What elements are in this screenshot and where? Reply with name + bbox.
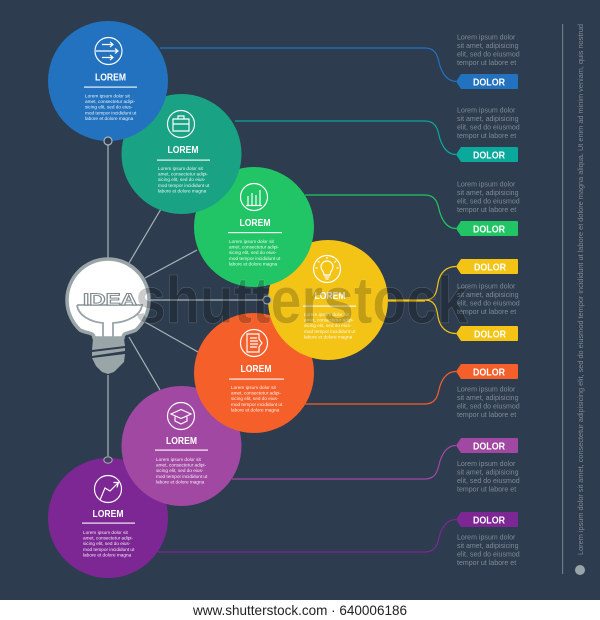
text block: orange: sit amet, adipisicing [457, 395, 519, 402]
text block: orange: tempor ut labore et [457, 412, 516, 419]
tag: yellow upper: DOLOR [474, 262, 507, 274]
body text: amet, consectetur adipi- [231, 391, 281, 396]
body text: amet, consectetur adipi- [304, 318, 354, 323]
heading: LOREM [92, 509, 124, 520]
text block: orange: elit, sed do eiusmod [457, 404, 520, 410]
body text: amet, consectetur adipi- [85, 99, 135, 104]
heading: LOREM [166, 436, 197, 447]
body text: mod tempor incididunt ut [231, 402, 283, 407]
text block: green: Lorem ipsum dolor [457, 182, 516, 188]
body text: mod tempor incididunt ut [156, 474, 208, 479]
tag: dark purple: DOLOR [473, 516, 506, 526]
heading: LOREM [240, 218, 270, 229]
tag: orange [456, 364, 518, 379]
footer strip: www.shutterstock.com · 640006186 [192, 602, 407, 618]
body text: Lorem ipsum dolor sit [83, 530, 129, 535]
body text: amet, consectetur adipi- [229, 245, 279, 250]
tag: green: DOLOR [473, 224, 506, 236]
body text: labore et dolore magna [231, 407, 280, 412]
icon: briefcase [168, 110, 194, 138]
text block: blue: sit amet, adipisicing [457, 43, 519, 50]
icon: graduation cap [168, 402, 194, 430]
tag: dark purple [456, 512, 518, 527]
body text: sicing elit, sed do eius- [229, 250, 277, 255]
body text: mod tempor incididunt ut [85, 110, 137, 115]
tag: blue: DOLOR [473, 78, 506, 88]
connector: blue to tag [160, 48, 456, 82]
icon: document [240, 330, 268, 356]
connector: green to tag [305, 195, 456, 228]
text block: teal: sit amet, adipisicing [457, 116, 519, 123]
icon: idea light bulb: IDEA [83, 290, 137, 309]
body text: mod tempor incididunt ut [304, 329, 356, 334]
body text: amet, consectetur adipi- [83, 536, 133, 541]
text block: orange [457, 386, 520, 419]
text block: yellow: elit, sed do eiusmod [457, 300, 520, 308]
body text: Lorem ipsum dolor sit [85, 94, 131, 98]
body text: Lorem ipsum dolor sit [158, 166, 204, 171]
tag: yellow lower: DOLOR [474, 330, 507, 340]
tag: purple: DOLOR [473, 442, 506, 452]
body text [304, 312, 356, 339]
tag: teal: DOLOR [473, 150, 506, 162]
connector: yellow forked to two tags [385, 266, 456, 334]
text block: green: sit amet, adipisicing [457, 190, 519, 197]
text block: purple: sit amet, adipisicing [457, 470, 519, 476]
body text: sicing elit, sed do eius- [158, 177, 206, 182]
body text [85, 94, 137, 121]
text block: purple: tempor ut labore et [457, 486, 516, 494]
icon: bar chart [240, 184, 268, 210]
watermark: shutterstock [135, 263, 468, 337]
body text: labore et dolore magna [156, 479, 205, 484]
text block: green: tempor ut labore et [457, 207, 516, 214]
body text: mod tempor incididunt ut [158, 183, 210, 188]
tag: yellow upper [456, 259, 518, 274]
text block: teal: tempor ut labore et [457, 133, 516, 140]
icon: arrows [95, 38, 122, 64]
text block: teal: elit, sed do eiusmod [457, 124, 520, 132]
heading: LOREM [95, 72, 126, 84]
circle: teal [122, 94, 242, 214]
text block: teal: Lorem ipsum dolor [457, 108, 516, 114]
circle: green [194, 167, 314, 287]
text block: teal [457, 108, 520, 140]
body text: mod tempor incididunt ut [229, 256, 281, 261]
circle: orange [194, 313, 314, 433]
text block: blue: elit, sed do eiusmod [457, 52, 520, 58]
body text: labore et dolore magna [158, 188, 207, 193]
circle: purple [122, 386, 242, 506]
text block: yellow: Lorem ipsum dolor [457, 284, 516, 290]
body text: labore et dolore magna [304, 334, 353, 339]
tag: blue [456, 74, 518, 89]
text block: dark purple [457, 534, 520, 567]
connector: dark purple to tag [158, 520, 456, 552]
text block: green: elit, sed do eiusmod [457, 198, 520, 206]
text block: dark purple: elit, sed do eiusmod [457, 552, 520, 558]
tag: teal [456, 147, 518, 162]
body text: mod tempor incididunt ut [83, 547, 135, 552]
heading: LOREM [240, 364, 272, 375]
text block: dark purple: tempor ut labore et [457, 560, 516, 567]
tag: purple [456, 438, 518, 453]
circle: blue [48, 21, 168, 141]
text block: purple: Lorem ipsum dolor [457, 461, 516, 468]
text block: yellow [457, 284, 520, 316]
body text [229, 239, 281, 266]
lower anchor dot [104, 457, 112, 463]
tag: green [456, 221, 518, 236]
body text: Lorem ipsum dolor sit [231, 385, 277, 390]
text block: purple: elit, sed do eiusmod [457, 478, 520, 485]
body text: sicing elit, sed do eius- [231, 396, 279, 401]
centre anchor dot [263, 296, 271, 304]
body text: Lorem ipsum dolor sit [156, 457, 202, 462]
upper anchor dot [104, 137, 112, 145]
body text: sicing elit, sed do eius- [85, 105, 133, 110]
body text: amet, consectetur adipi- [156, 463, 206, 468]
body text: amet, consectetur adipi- [158, 172, 208, 177]
heading: LOREM [168, 145, 198, 156]
body text: sicing elit, sed do eius- [83, 541, 131, 546]
body text: Lorem ipsum dolor sit [229, 239, 275, 244]
connector: orange to tag [305, 372, 456, 404]
body text: sicing elit, sed do eius- [156, 468, 204, 473]
side bullet [575, 565, 585, 575]
body text [156, 457, 208, 484]
heading: LOREM [314, 291, 346, 302]
text block: blue: Lorem ipsum dolor [457, 34, 516, 42]
body text [83, 530, 135, 557]
body text: Lorem ipsum dolor sit [304, 312, 350, 317]
body text: labore et dolore magna [83, 552, 132, 557]
tag: orange: DOLOR [473, 368, 506, 378]
body text [158, 166, 210, 193]
icon: growth chart [94, 476, 122, 502]
circle: dark purple [48, 458, 168, 578]
text block: dark purple: sit amet, adipisicing [457, 543, 519, 550]
text block: purple [457, 461, 520, 494]
text block: orange: Lorem ipsum dolor [457, 386, 516, 394]
connector: teal to tag [235, 121, 456, 154]
text block: blue: tempor ut labore et [457, 60, 516, 67]
text block: dark purple: Lorem ipsum dolor [457, 534, 516, 542]
footer strip [0, 600, 600, 620]
text block: yellow: tempor ut labore et [457, 309, 516, 316]
text block: yellow: sit amet, adipisicing [457, 292, 519, 299]
connecting spokes from bulb [108, 145, 263, 456]
body text [231, 385, 283, 412]
icon: idea light bulb [67, 259, 149, 374]
vertical side text: Lorem ipsum dolor sit amet, consectetur adipisicing elit, sed do eiusmod tempor incididunt ut labore et dolore magna aliqua. Ut enim ad minim veniam, quis nostrud [576, 24, 585, 555]
body text: sicing elit, sed do eius- [304, 323, 352, 328]
circle: yellow [268, 240, 388, 360]
icon: light bulb [314, 256, 340, 282]
tag: yellow lower [456, 326, 518, 341]
connector: purple to tag [232, 446, 456, 479]
text block: blue [457, 34, 520, 67]
text block: green [457, 182, 520, 214]
body text: labore et dolore magna [229, 261, 278, 266]
body text: labore et dolore magna [85, 116, 134, 121]
